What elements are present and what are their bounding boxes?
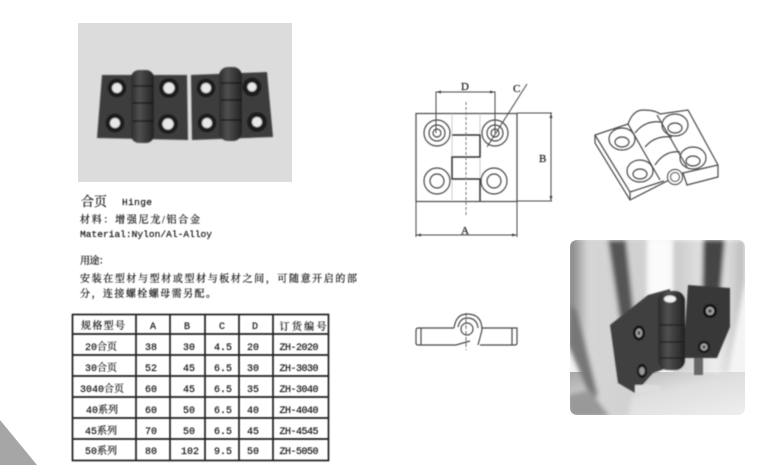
table header: D [252,322,258,333]
table row: 50: 80 [145,447,157,458]
table row: 3040: 6.5 [214,385,232,396]
table header: 规格型号 [81,319,125,332]
table row: 20: 20 [247,343,259,354]
table row: 30: 52 [145,364,157,375]
table row: 40 [86,403,318,417]
diagram: side view [416,313,517,350]
table row: 45: 70 [145,427,157,438]
table row: 40: 60 [145,406,157,417]
table row: 40: 50 [183,406,195,417]
table row: 20: 4.5 [214,343,232,354]
text block: material: 材料：增强尼龙/铝合金 [80,213,200,226]
table row: 3040: 35 [247,385,259,396]
table row: 50: 9.5 [214,447,232,458]
table row: 3040 [80,382,318,396]
table header [81,319,326,333]
table row: 45: 45 [247,427,259,438]
table row: 45: 45系列 [85,424,117,438]
table header: C [219,322,225,333]
dimension labels: A [461,225,469,237]
specification table [72,314,329,460]
table row: 30 [85,361,318,375]
table row: 40: 40系列 [86,403,118,417]
heading: hinge title: 合页 [81,194,107,209]
table row: 50: 102 [181,447,199,458]
heading: hinge title [81,194,152,209]
table row: 30: ZH-3030 [280,364,318,375]
table row: 45: 6.5 [214,427,232,438]
dimension labels: D [461,81,469,93]
text block: material: Material:Nylon/Al-Alloy [80,229,212,240]
table row: 3040: ZH-3040 [280,385,318,396]
heading: hinge title: Hinge [122,197,152,208]
table row: 3040: 60 [145,385,157,396]
table header: B [184,322,190,333]
table row: 20: 30 [183,343,195,354]
table row: 45 [85,424,318,438]
dimension labels [461,81,546,237]
text block: material [80,213,212,240]
table row: 20 [85,340,318,354]
table row: 3040: 45 [183,385,195,396]
table row: 45: 50 [183,427,195,438]
table row: 20: 20合页 [85,340,117,354]
table row: 40: 6.5 [214,406,232,417]
panel: installation photo [568,238,745,417]
table row: 3040: 3040合页 [80,382,124,396]
diagram: isometric hinge [595,110,718,200]
panel: hinge product photo [78,23,292,182]
table row: 30: 6.5 [214,364,232,375]
diagram: dimensioned front view [416,81,552,237]
table row: 50: 50系列 [85,444,117,458]
table row: 50 [85,444,318,458]
table row: 40: 40 [247,406,259,417]
table row: 40: ZH-4040 [280,406,318,417]
table row: 45: ZH-4545 [280,427,318,438]
dimension labels: B [539,153,546,165]
table row: 50: 50 [247,447,259,458]
text block: usage: 安装在型材与型材或型材与板材之间，可随意开启的部 [80,272,357,285]
table row: 20: 38 [145,343,157,354]
table row: 30: 30合页 [85,361,117,375]
text block: usage: 分，连接螺栓螺母需另配。 [80,287,216,300]
table header: 订货编号 [280,320,326,333]
table row: 30: 30 [247,364,259,375]
dimension labels: C [513,83,520,95]
table row: 30: 45 [183,364,195,375]
text block: usage: 用途： [80,254,109,267]
table header: A [150,322,156,333]
corner triangle [0,420,37,465]
text block: usage [80,254,357,300]
table row: 50: ZH-5050 [280,447,318,458]
table row: 20: ZH-2020 [280,343,318,354]
